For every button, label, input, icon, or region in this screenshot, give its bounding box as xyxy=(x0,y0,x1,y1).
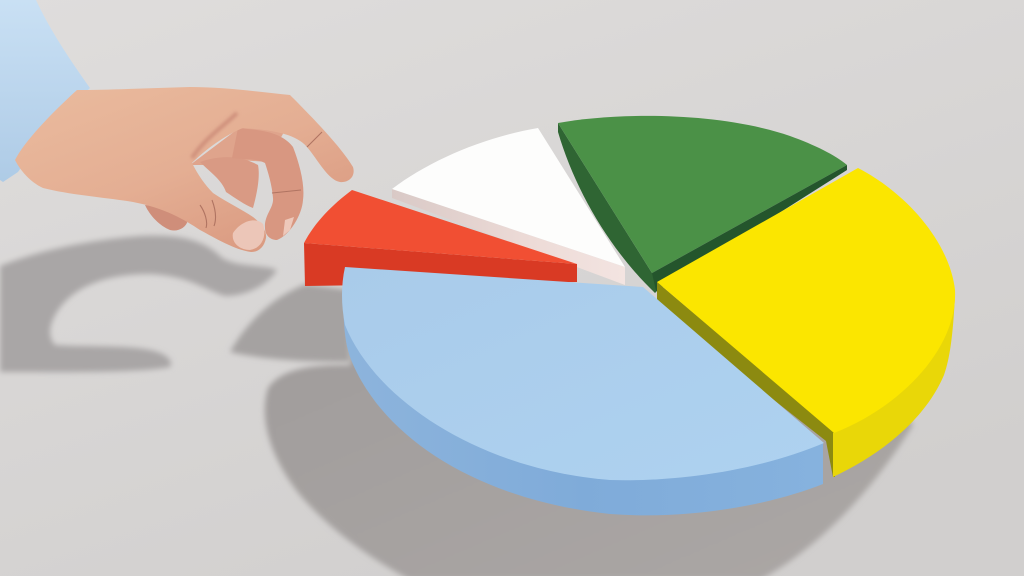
shadow of pie xyxy=(265,300,913,576)
fingertip highlight xyxy=(283,217,294,236)
shadow of hand xyxy=(0,236,277,372)
sleeve xyxy=(0,0,90,182)
slice: red xyxy=(304,190,577,286)
slice: blue xyxy=(342,267,824,515)
base of the fingers xyxy=(190,125,285,165)
slice: white xyxy=(392,128,625,285)
knuckle creases xyxy=(200,132,322,228)
middle finger xyxy=(232,128,303,240)
thumbnail xyxy=(233,220,264,250)
shadow of red slice xyxy=(230,284,350,362)
hand xyxy=(15,87,354,252)
skin fold near index finger xyxy=(192,113,237,158)
ring finger xyxy=(200,157,259,208)
pie chart xyxy=(304,116,955,515)
pinky finger xyxy=(145,205,188,231)
slice: yellow xyxy=(657,168,955,477)
slice: green xyxy=(558,116,847,293)
back of hand, thumb and index finger xyxy=(15,87,354,252)
